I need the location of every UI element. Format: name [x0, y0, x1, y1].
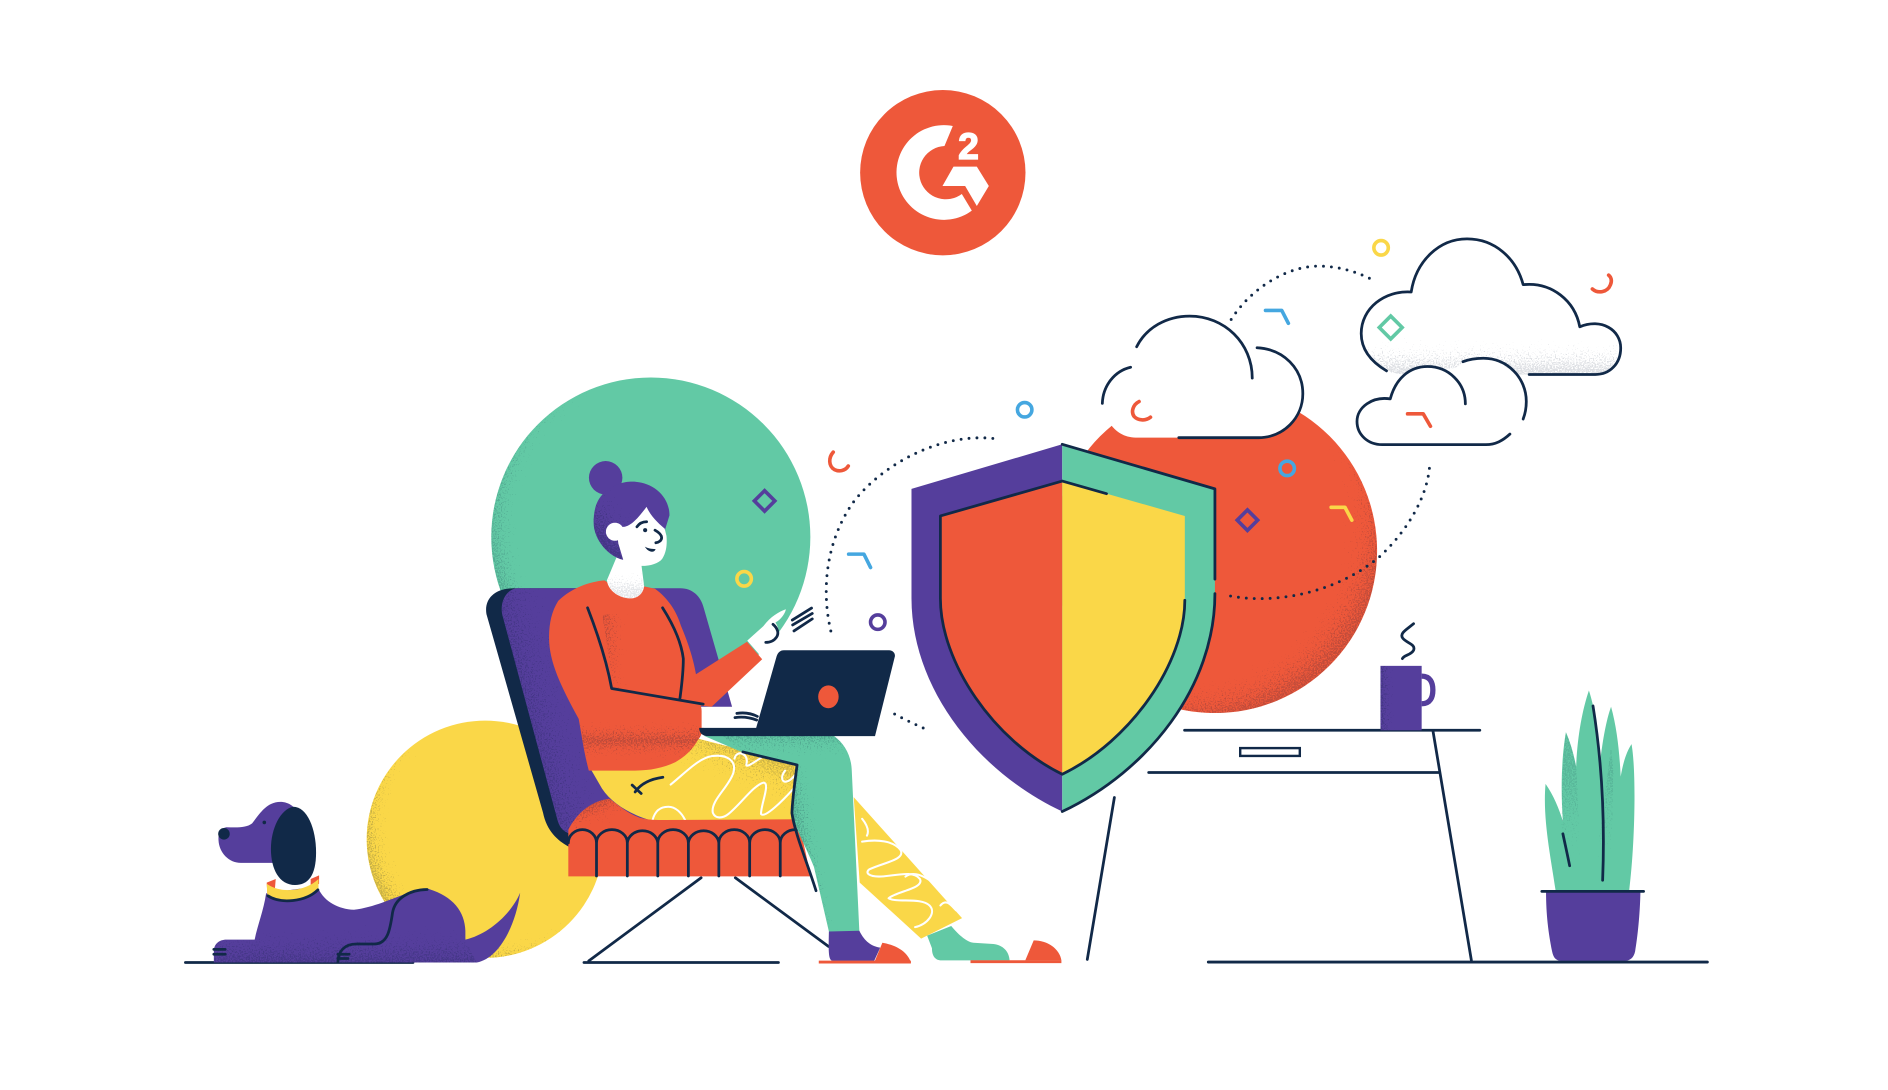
logo: G2 badge: 2 [958, 125, 979, 167]
neck [607, 556, 644, 598]
icon: red arc near shield [830, 452, 848, 471]
icon: blue tick by cloud [1265, 310, 1288, 323]
cloud: over red circle [1102, 316, 1303, 438]
shield inner right [1062, 481, 1185, 774]
chair back cushion [502, 588, 732, 843]
icon: red arc top right [1592, 275, 1611, 292]
plant leaves [1545, 691, 1635, 891]
plant pot [1546, 891, 1640, 961]
face [616, 507, 667, 566]
face features [637, 522, 662, 552]
chair back outline [486, 588, 592, 846]
raised hand with motion lines [747, 608, 812, 659]
background circle: green [491, 377, 810, 697]
icon: blue ring on red circle [1280, 461, 1294, 476]
table [1087, 730, 1480, 960]
plant in pot [1542, 691, 1644, 961]
icon: purple diamond on green circle [754, 491, 775, 511]
sweater seams [588, 608, 703, 704]
shield inner left [940, 481, 1062, 774]
icon: yellow ring [737, 572, 751, 586]
woman's front leg [704, 736, 859, 931]
icon: yellow ring top [1374, 241, 1388, 255]
hair bun [589, 461, 622, 495]
icon: red tick in cloud [1408, 414, 1430, 426]
icon: purple ring [871, 615, 885, 629]
table drawer handle [1240, 748, 1300, 756]
dog [214, 802, 520, 963]
dotted path: between clouds [1231, 266, 1374, 319]
background circle: yellow [367, 721, 604, 958]
mug with steam [1380, 624, 1433, 730]
dog head [218, 802, 301, 863]
cloud: upper right [1361, 239, 1621, 374]
woman's front foot and shoe [819, 931, 911, 963]
dotted path: around shield left [826, 438, 997, 631]
back shoe [1025, 940, 1061, 960]
cloud: lower right [1357, 358, 1526, 445]
chair [486, 588, 828, 961]
typing hand [702, 707, 758, 728]
laptop logo dot [818, 685, 839, 708]
icon: green diamond in cloud [1379, 316, 1402, 339]
dog collar [267, 875, 319, 901]
trouser scribble [671, 756, 793, 817]
logo: G2 badge [860, 90, 1025, 255]
dog nose [218, 828, 230, 840]
dog eye [262, 821, 266, 824]
trouser tick mark [632, 777, 663, 793]
ear [606, 523, 624, 541]
woman's trousers: upper [589, 737, 798, 824]
chair seat with scallops [568, 799, 811, 876]
chair legs [589, 878, 828, 961]
laptop [699, 650, 895, 736]
back leg scribble [862, 841, 932, 927]
background circle: red [1053, 389, 1377, 713]
shield outlines [940, 444, 1215, 812]
icon: blue ring above shield [1017, 403, 1032, 417]
shield outer right [1062, 444, 1215, 812]
hair [594, 482, 669, 560]
dog ear [271, 807, 316, 885]
shield [911, 444, 1215, 812]
icon: yellow tick on red circle [1331, 507, 1352, 520]
woman's head and neck [589, 461, 669, 598]
dog body and tail [214, 886, 520, 963]
shield outer left [911, 444, 1062, 812]
woman's back foot [927, 926, 1061, 962]
dotted path: over red circle to cloud [1231, 461, 1430, 599]
woman's torso: red sweater [549, 580, 762, 771]
woman's trousers: back leg [854, 797, 962, 939]
icon: red arc in cloud [1133, 402, 1150, 420]
icon: purple diamond on red circle [1237, 510, 1258, 530]
ground lines [185, 961, 1707, 964]
icon: blue tick [849, 554, 871, 567]
dotted path: below laptop [895, 714, 927, 730]
